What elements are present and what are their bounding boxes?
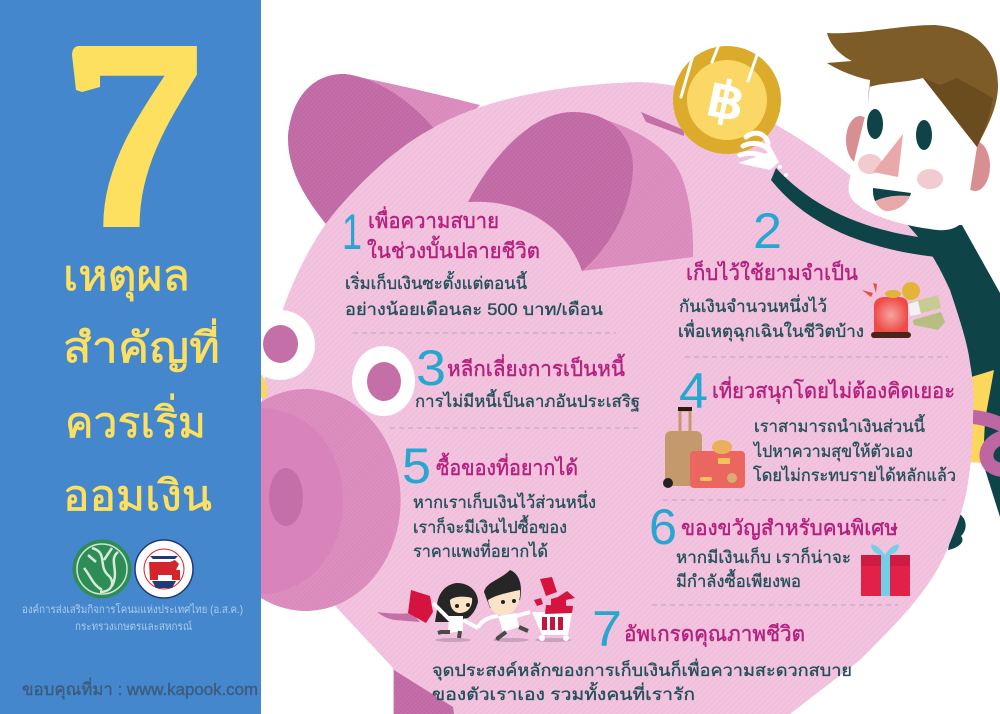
section 6 (649, 499, 910, 596)
section 1 (342, 204, 603, 319)
icon: gift box (861, 544, 910, 596)
body 4: ไปหาความสุขให้ตัวเอง (752, 441, 913, 462)
body 7 (432, 658, 852, 704)
near ear lighter fold (582, 118, 693, 271)
body 6: หากมีเงินเก็บ เราก็น่าจะ (676, 546, 851, 567)
left cheek (858, 154, 882, 174)
icon: siren and money (862, 282, 945, 338)
boy (478, 570, 530, 640)
heading 2: เก็บไว้ใช้ยามจำเป็น (686, 259, 858, 285)
pig far ear (288, 74, 480, 235)
body 4 (752, 414, 956, 485)
organisation name (22, 602, 243, 633)
body 1: อย่างน้อยเดือนละ 500 บาท/เดือน (345, 300, 603, 319)
heading 1 (367, 206, 540, 263)
yellow star behind pig (968, 370, 994, 463)
pig tail (966, 416, 1000, 470)
right cheek (917, 169, 943, 189)
number 1: 1 (342, 204, 362, 260)
number 5: 5 (402, 438, 431, 494)
pig snout (261, 389, 420, 622)
pig leg (394, 670, 454, 714)
section 7 (432, 601, 852, 704)
number 6: 6 (649, 499, 677, 555)
shadows (435, 638, 571, 642)
nostril (269, 468, 303, 526)
source credit: ขอบคุณที่มา : www.kapook.com (22, 677, 258, 700)
heading 4: เที่ยวสนุกโดยไม่ต้องคิดเยอะ (712, 376, 955, 404)
man's arm (771, 168, 945, 258)
number 3: 3 (416, 340, 446, 396)
nose (873, 134, 903, 177)
logo: green seal (72, 540, 132, 598)
logo: cattle seal (135, 540, 193, 598)
title: เหตุผล (63, 252, 190, 302)
heading 3: หลีกเลี่ยงการเป็นหนี้ (447, 354, 625, 381)
body 5: หากเราเก็บเงินไว้ส่วนหนึ่ง (413, 490, 596, 512)
heading 1: เพื่อความสบาย (368, 206, 499, 233)
body 5: ราคาแพงที่อยากได้ (413, 539, 548, 561)
girl (433, 583, 478, 638)
body 5 (413, 490, 596, 561)
section 4 (663, 363, 956, 488)
right eye (916, 120, 932, 150)
organisation name: กระทรวงเกษตรและสหกรณ์ (75, 620, 192, 633)
body 4: โดยไม่กระทบรายได้หลักแล้ว (753, 465, 956, 485)
body 2: เพื่อเหตุฉุกเฉินในชีวิตบ้าง (678, 319, 864, 342)
pig eyes (245, 310, 415, 416)
right ear (960, 141, 990, 191)
left blue panel (0, 0, 261, 714)
coin inner face (687, 60, 767, 140)
man's hand behind pig (948, 512, 966, 550)
man's torso (880, 225, 1000, 517)
organisation name: องค์การส่งเสริมกิจการโคนมแห่งประเทศไทย (อ.ส.ค.) (22, 602, 243, 616)
title: ควรเริ่ม (65, 394, 206, 446)
body 1 (345, 271, 603, 319)
far ear lighter side (340, 74, 480, 170)
body 4: เราสามารถนำเงินส่วนนี้ (754, 414, 925, 436)
body 6: มีกำลังซื้อเพียงพอ (676, 569, 801, 591)
hair shadow (923, 78, 993, 147)
man's body and tail behind the pig (880, 225, 1000, 550)
shirt buttons (778, 165, 788, 177)
far ear darker side (288, 74, 435, 235)
heading 6: ของขวัญสำหรับคนพิเศษ (681, 517, 898, 540)
coin slot (641, 112, 684, 136)
yellow sliver beside snout (261, 373, 267, 398)
illustration: shopping couple (408, 570, 575, 642)
title (63, 252, 220, 519)
body 3: การไม่มีหนี้เป็นลาภอันประเสริฐ (415, 389, 640, 412)
panel background (0, 0, 261, 714)
right eye (352, 346, 415, 416)
body 1: เริ่มเก็บเงินซะตั้งแต่ตอนนี้ (345, 271, 527, 293)
hand (738, 133, 779, 170)
hair (827, 25, 998, 147)
near ear darker front (468, 112, 633, 271)
body 5: เราก็จะมีเงินไปซื้อของ (413, 515, 567, 537)
shopping cart (532, 577, 575, 641)
body 2 (678, 294, 864, 342)
red shopping bag (408, 590, 433, 623)
pig near ear (468, 112, 693, 271)
section 3 (415, 340, 640, 412)
pig body (262, 82, 974, 714)
heading 7: อัพเกรดคุณภาพชีวิต (624, 623, 805, 647)
body 7: จุดประสงค์หลักของการเก็บเงินก็เพื่อความสะดวกสบาย (432, 658, 852, 681)
mouth (873, 188, 911, 211)
title: ออมเงิน (63, 472, 212, 519)
heading 1: ในช่วงบั้นปลายชีวิต (367, 236, 540, 263)
body 7: ของตัวเราเอง รวมทั้งคนที่เรารัก (432, 682, 695, 704)
snout inner circle (261, 408, 343, 594)
section 2 (678, 203, 945, 342)
body 6 (676, 546, 851, 591)
baht symbol: ฿ (701, 69, 750, 132)
body 2: กันเงินจำนวนหนึ่งไว้ (679, 294, 827, 316)
coin outer rim (673, 46, 781, 154)
section 5 (402, 438, 596, 561)
left ear (846, 116, 874, 164)
number 4: 4 (679, 363, 708, 419)
icon: luggage (663, 409, 745, 488)
snout outer circle (261, 389, 401, 611)
number 2: 2 (753, 203, 782, 259)
man (738, 25, 998, 258)
snout lower shadow (377, 612, 420, 622)
title: สำคัญที่ (63, 319, 220, 372)
number 7: 7 (592, 601, 622, 657)
coin (673, 46, 781, 154)
left eye (867, 109, 883, 139)
motion lines (681, 47, 757, 97)
face (849, 78, 977, 230)
heading 5: ซื้อของที่อยากได้ (436, 453, 578, 480)
left eye (245, 310, 315, 380)
